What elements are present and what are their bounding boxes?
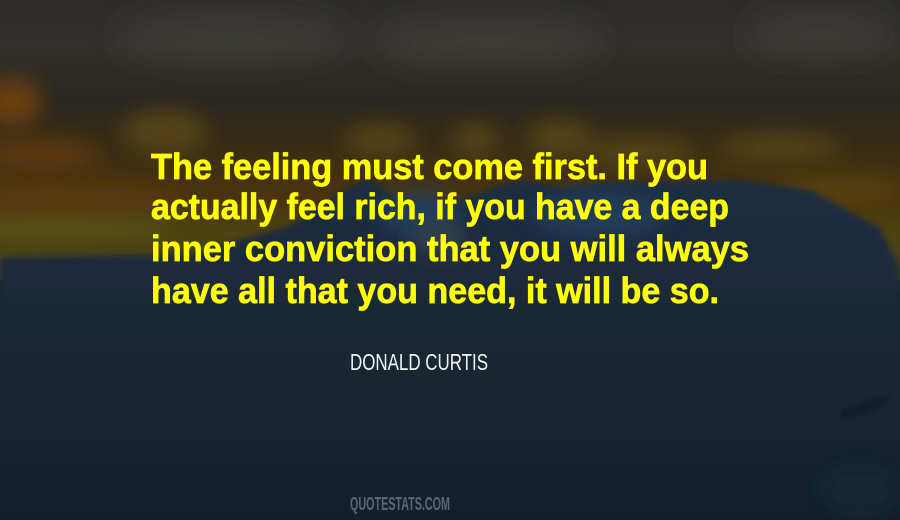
- background: dark blue snow hills: [0, 178, 900, 520]
- quote line 1: The feeling must come first. If you: [151, 146, 708, 187]
- author name: DONALD CURTIS: [350, 349, 488, 375]
- quote line 2: actually feel rich, if you have a deep: [151, 186, 729, 227]
- background: dusk sky: [0, 0, 900, 280]
- quote line 3: inner conviction that you will always: [151, 228, 749, 269]
- source watermark: QUOTESTATS.COM: [350, 494, 450, 514]
- quote line 4: have all that you need, it will be so.: [151, 270, 719, 311]
- quote text: [151, 146, 749, 311]
